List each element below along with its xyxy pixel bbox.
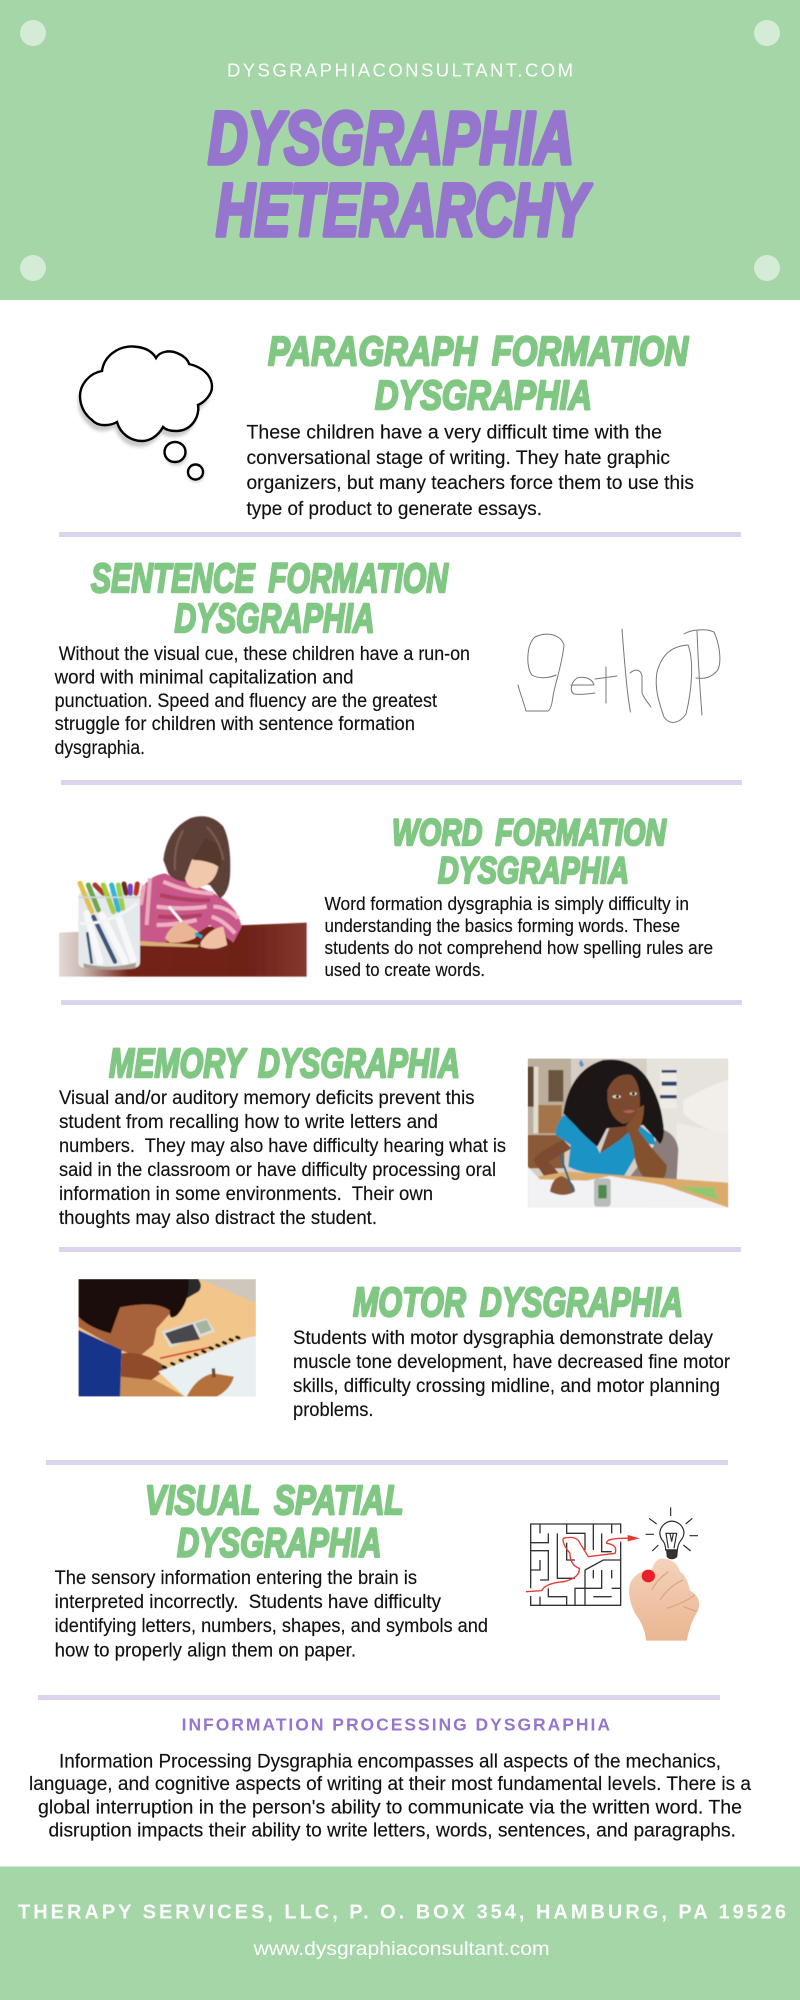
body text: conversational stage of writing. They hate graphic (246, 448, 670, 469)
heading (392, 812, 667, 891)
heading (91, 555, 449, 641)
heading: VISUAL SPATIAL (145, 1477, 404, 1523)
body text: word with minimal capitalization and (54, 667, 354, 688)
body text: numbers. They may also have difficulty hearing what is (59, 1136, 506, 1157)
body text (29, 1752, 751, 1842)
body text (246, 423, 694, 520)
heading: DYSGRAPHIA (375, 372, 592, 418)
body text: Visual and/or auditory memory deficits prevent this (59, 1088, 474, 1109)
icon: maze, light bulb and hand (526, 1507, 699, 1641)
heading: PARAGRAPH FORMATION (268, 328, 689, 374)
maze (531, 1524, 621, 1605)
body text: punctuation. Speed and fluency are the greatest (55, 691, 438, 712)
body text: thoughts may also distract the student. (59, 1208, 377, 1229)
body text (324, 894, 713, 980)
panel: word formation dysgraphia (59, 812, 713, 980)
body text: organizers, but many teachers force them to use this (246, 473, 694, 494)
photo: boy writing beside a calculator (78, 1279, 256, 1397)
heading: MEMORY DYSGRAPHIA (109, 1040, 460, 1086)
icon: thought bubble (78, 346, 212, 482)
heading (268, 328, 689, 418)
address: THERAPY SERVICES, LLC, P. O. BOX 354, HAMBURG, PA 19526 (18, 1902, 786, 1924)
body text: struggle for children with sentence formation (55, 714, 415, 735)
body text: identifying letters, numbers, shapes, and symbols and (55, 1616, 488, 1637)
body text: These children have a very difficult time with the (246, 423, 662, 444)
body text: muscle tone development, have decreased fine motor (293, 1352, 731, 1373)
panel: information processing dysgraphia (29, 1715, 751, 1842)
heading: INFORMATION PROCESSING DYSGRAPHIA (182, 1715, 610, 1735)
panel: memory dysgraphia (59, 1040, 728, 1229)
body text: said in the classroom or have difficulty processing oral (59, 1160, 496, 1181)
body text (54, 644, 470, 759)
body text (293, 1328, 731, 1421)
photo: girl drawing with markers (59, 816, 307, 977)
body text: information in some environments. Their own (59, 1184, 433, 1205)
body text: language, and cognitive aspects of writing at their most fundamental levels. There is a (29, 1774, 751, 1795)
header banner (0, 0, 800, 300)
body text (55, 1568, 488, 1662)
body text (59, 1088, 506, 1229)
body text: skills, difficulty crossing midline, and motor planning (293, 1376, 720, 1397)
photo: girl thinking at desk (528, 1058, 728, 1208)
body text: dysgraphia. (55, 738, 145, 759)
heading: DYSGRAPHIA (438, 850, 629, 891)
heading: DYSGRAPHIA (174, 595, 374, 641)
footer banner (0, 1866, 800, 2000)
heading: MOTOR DYSGRAPHIA (353, 1279, 683, 1325)
body text: Without the visual cue, these children have a run-on (59, 644, 470, 665)
main title: HETERARCHY (216, 168, 592, 252)
panel: motor dysgraphia (78, 1279, 731, 1421)
body text: Students with motor dysgraphia demonstrate delay (293, 1328, 713, 1349)
heading: DYSGRAPHIA (177, 1520, 382, 1566)
main title: DYSGRAPHIA (208, 96, 574, 180)
panel: visual spatial dysgraphia (55, 1477, 699, 1662)
heading: SENTENCE FORMATION (91, 555, 449, 601)
panel: sentence formation dysgraphia (54, 555, 720, 759)
body text: student from recalling how to write letters and (59, 1112, 438, 1133)
body text: type of product to generate essays. (246, 499, 542, 520)
website url: www.dysgraphiaconsultant.com (253, 1938, 550, 1960)
body text: students do not comprehend how spelling rules are (324, 938, 713, 958)
body text: interpreted incorrectly. Students have difficulty (55, 1592, 441, 1613)
body text: Information Processing Dysgraphia encompasses all aspects of the mechanics, (59, 1752, 721, 1773)
heading: WORD FORMATION (392, 812, 667, 853)
hand with marker (629, 1558, 699, 1641)
body text: problems. (293, 1400, 374, 1421)
panel: paragraph formation dysgraphia (78, 328, 694, 520)
body text: global interruption in the person's ability to communicate via the written word. The (38, 1798, 742, 1818)
body text: understanding the basics forming words. These (324, 916, 680, 936)
light bulb (646, 1507, 698, 1559)
body text: disruption impacts their ability to write letters, words, sentences, and paragraphs. (48, 1820, 736, 1842)
body text: used to create words. (324, 960, 485, 980)
main title (208, 96, 592, 252)
body text: Word formation dysgraphia is simply difficulty in (324, 894, 689, 914)
heading (145, 1477, 404, 1566)
handwriting sample (518, 629, 720, 722)
website line: DYSGRAPHIACONSULTANT.COM (227, 60, 573, 80)
body text: The sensory information entering the brain is (55, 1568, 417, 1589)
body text: how to properly align them on paper. (55, 1640, 356, 1662)
